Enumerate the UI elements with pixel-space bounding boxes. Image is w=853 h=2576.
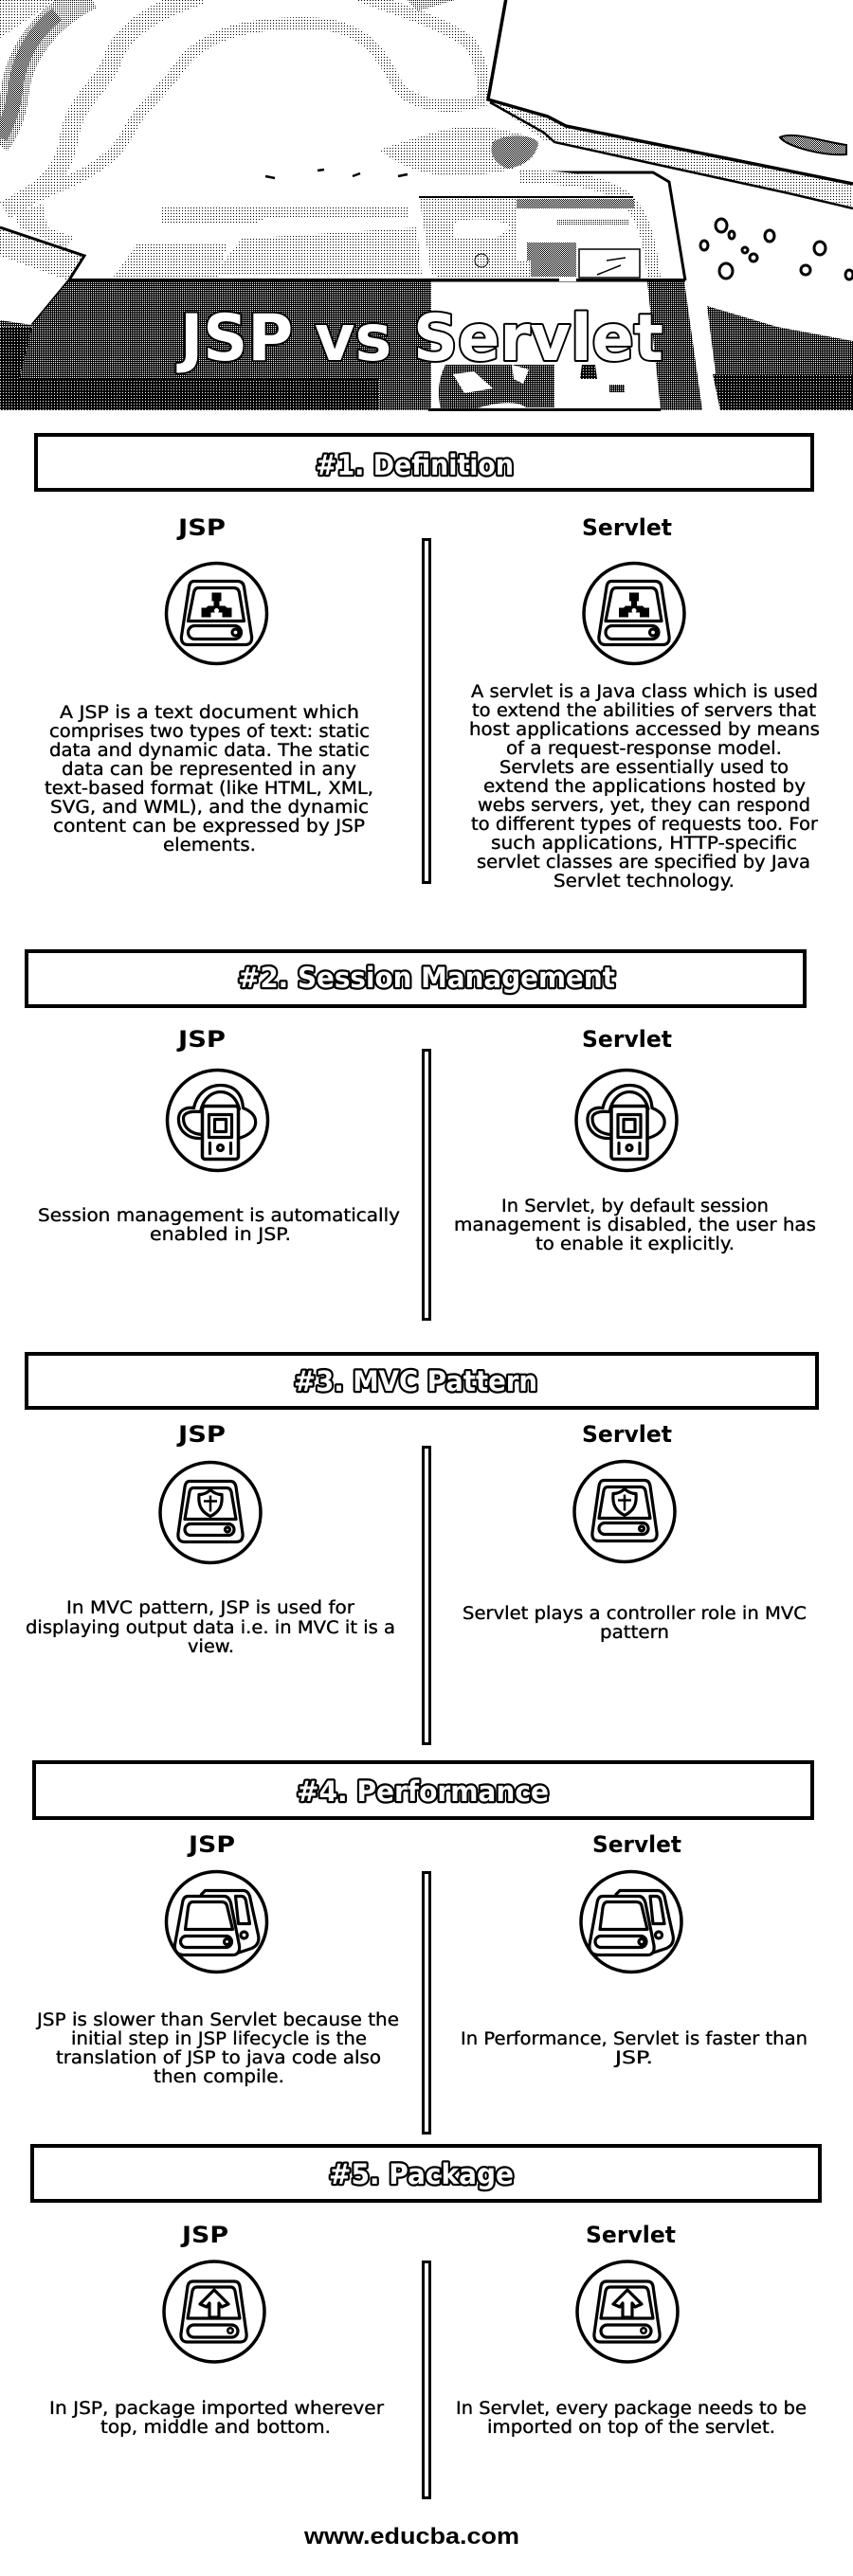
text block: JSP performance: JSP is slower than Servlet because the <box>36 2010 399 2030</box>
text block: JSP session <box>38 1206 400 1245</box>
text block: JSP definition <box>45 703 373 856</box>
left device corner <box>0 229 84 280</box>
text block: Servlet definition: servlet classes are specified by Java <box>477 853 810 873</box>
divider <box>423 1448 430 1743</box>
text block: Servlet performance <box>461 2029 808 2068</box>
text block: JSP MVC: displaying output data i.e. in MVC it is a <box>26 1618 395 1638</box>
divider <box>423 1050 430 1319</box>
column heading: JSP: JSP <box>176 1421 226 1448</box>
section header: package: #5. Package <box>329 2158 514 2190</box>
icon: network drive Servlet <box>584 563 684 663</box>
text block: JSP session: enabled in JSP. <box>150 1225 291 1245</box>
laptop screen edge stipple <box>488 100 853 207</box>
text block: Servlet session: management is disabled, the user has <box>454 1216 816 1235</box>
panel: session management <box>27 951 816 1319</box>
divider <box>423 2262 430 2497</box>
scattered rings <box>700 219 853 279</box>
text block: JSP package: In JSP, package imported wherever <box>49 2399 384 2419</box>
text block: Servlet definition: Servlets are essentially used to <box>499 758 789 778</box>
text block: JSP performance: initial step in JSP lifecycle is the <box>71 2029 367 2049</box>
icon: cloud device JSP <box>167 1071 267 1171</box>
section header: performance: #4. Performance <box>297 1775 549 1808</box>
text block: JSP package <box>49 2399 384 2438</box>
text block: JSP performance: translation of JSP to java code also <box>56 2048 381 2068</box>
text block: JSP definition: content can be expressed by JSP <box>53 817 365 837</box>
swirl band: top right <box>359 0 484 100</box>
text block: Servlet definition: host applications accessed by means <box>469 720 820 740</box>
title: JSP vs Servlet <box>176 301 663 376</box>
text block: JSP session: Session management is automatically <box>38 1206 400 1226</box>
text block: Servlet definition: A servlet is a Java class which is used <box>471 682 818 702</box>
text block: Servlet performance: JSP. <box>614 2048 653 2068</box>
column heading: Servlet: Servlet <box>582 1026 672 1053</box>
text block: Servlet MVC: Servlet plays a controller role in MVC <box>463 1604 807 1624</box>
text block: Servlet package: In Servlet, every package needs to be <box>456 2399 807 2419</box>
swirl band: darker left <box>0 0 90 142</box>
icon: upload drive Servlet <box>577 2261 678 2362</box>
section header: definition <box>36 435 812 490</box>
text block: Servlet definition: to extend the abilities of servers that <box>472 701 816 721</box>
white block blotches <box>439 365 554 409</box>
column heading: Servlet: Servlet <box>582 514 672 541</box>
divider <box>423 540 430 883</box>
text block: Servlet MVC <box>463 1604 807 1643</box>
dark strip <box>647 281 702 410</box>
icon: double drive Servlet <box>581 1872 681 1973</box>
panel: package <box>32 2146 820 2497</box>
section header: package <box>32 2146 820 2201</box>
right capsule <box>780 135 846 154</box>
column heading: JSP: JSP <box>176 514 226 541</box>
text block: Servlet MVC: pattern <box>600 1623 669 1643</box>
dark dithered band <box>0 281 431 410</box>
icon: shield drive Servlet <box>574 1461 675 1561</box>
text block: Servlet definition: such applications, HTTP-specific <box>491 834 797 854</box>
lower-left stipple <box>14 204 74 248</box>
panel: performance <box>34 1762 812 2134</box>
laptop screen outline <box>488 0 853 184</box>
text block: Servlet definition: extend the applications hosted by <box>483 777 806 797</box>
text block: JSP MVC: view. <box>188 1637 234 1657</box>
text block: JSP MVC <box>26 1598 395 1657</box>
text block: JSP definition: text-based format (like HTML, XML, <box>45 779 373 799</box>
column heading: JSP: JSP <box>176 1026 226 1053</box>
icon: double drive JSP <box>167 1872 267 1973</box>
swirl band: mid <box>5 0 201 210</box>
text block: JSP MVC: In MVC pattern, JSP is used for <box>66 1598 354 1618</box>
icon: network drive JSP <box>167 563 267 663</box>
section header: definition: #1. Definition <box>316 449 514 481</box>
text block: JSP package: top, middle and bottom. <box>100 2418 331 2438</box>
section header: session management: #2. Session Management <box>238 962 615 994</box>
hero: dithered desk photo <box>0 0 853 411</box>
text block: Servlet package: imported on top of the servlet. <box>487 2418 775 2438</box>
text block: Servlet session: to enable it explicitly. <box>535 1234 735 1254</box>
icon: shield drive JSP <box>160 1463 261 1563</box>
text block: JSP definition: elements. <box>163 836 256 856</box>
text block: Servlet definition: of a request-response model. <box>506 739 782 759</box>
footer url: www.educba.com <box>303 2524 519 2549</box>
text block: JSP definition: A JSP is a text document which <box>60 703 359 723</box>
text block: Servlet package <box>456 2399 807 2438</box>
column heading: JSP: JSP <box>187 1831 235 1858</box>
section header: MVC pattern: #3. MVC Pattern <box>294 1365 537 1397</box>
section header: session management <box>27 951 805 1006</box>
text block: JSP definition: data can be represented in any <box>62 760 356 780</box>
keyboard stipple <box>160 206 408 224</box>
dark right region <box>707 306 853 410</box>
top-left stippled corner <box>0 0 57 38</box>
icon: cloud device Servlet <box>576 1071 677 1171</box>
text block: Servlet session: In Servlet, by default session <box>501 1197 769 1216</box>
text block: Servlet performance: In Performance, Servlet is faster than <box>461 2029 808 2049</box>
text block: JSP performance <box>36 2010 399 2087</box>
section header: MVC pattern <box>27 1354 817 1408</box>
circuit details <box>419 196 640 278</box>
column heading: Servlet: Servlet <box>592 1831 681 1858</box>
column heading: Servlet: Servlet <box>586 2222 676 2248</box>
text block: Servlet definition: to different types of requests too. For <box>471 815 818 835</box>
divider <box>423 1872 430 2134</box>
text block: Servlet definition <box>469 682 820 892</box>
text block: JSP performance: then compile. <box>154 2067 284 2087</box>
text block: JSP definition: SVG, and WML), and the dynamic <box>50 798 369 818</box>
text block: JSP definition: data and dynamic data. The static <box>49 741 370 761</box>
column heading: Servlet: Servlet <box>582 1421 672 1448</box>
keyboard outline <box>519 172 685 280</box>
text block: JSP definition: comprises two types of text: static <box>49 722 370 742</box>
panel: MVC pattern <box>26 1354 817 1743</box>
text block: Servlet definition: webs servers, yet, they can respond <box>478 796 810 816</box>
text block: Servlet definition: Servlet technology. <box>554 872 735 892</box>
column heading: JSP: JSP <box>180 2222 228 2248</box>
icon: upload drive JSP <box>164 2261 264 2362</box>
section header: performance <box>34 1762 812 1818</box>
swirl band: light arch <box>38 24 485 195</box>
stippled object on desk <box>379 126 538 176</box>
text block: Servlet session <box>454 1197 816 1254</box>
panel: definition <box>36 435 820 892</box>
